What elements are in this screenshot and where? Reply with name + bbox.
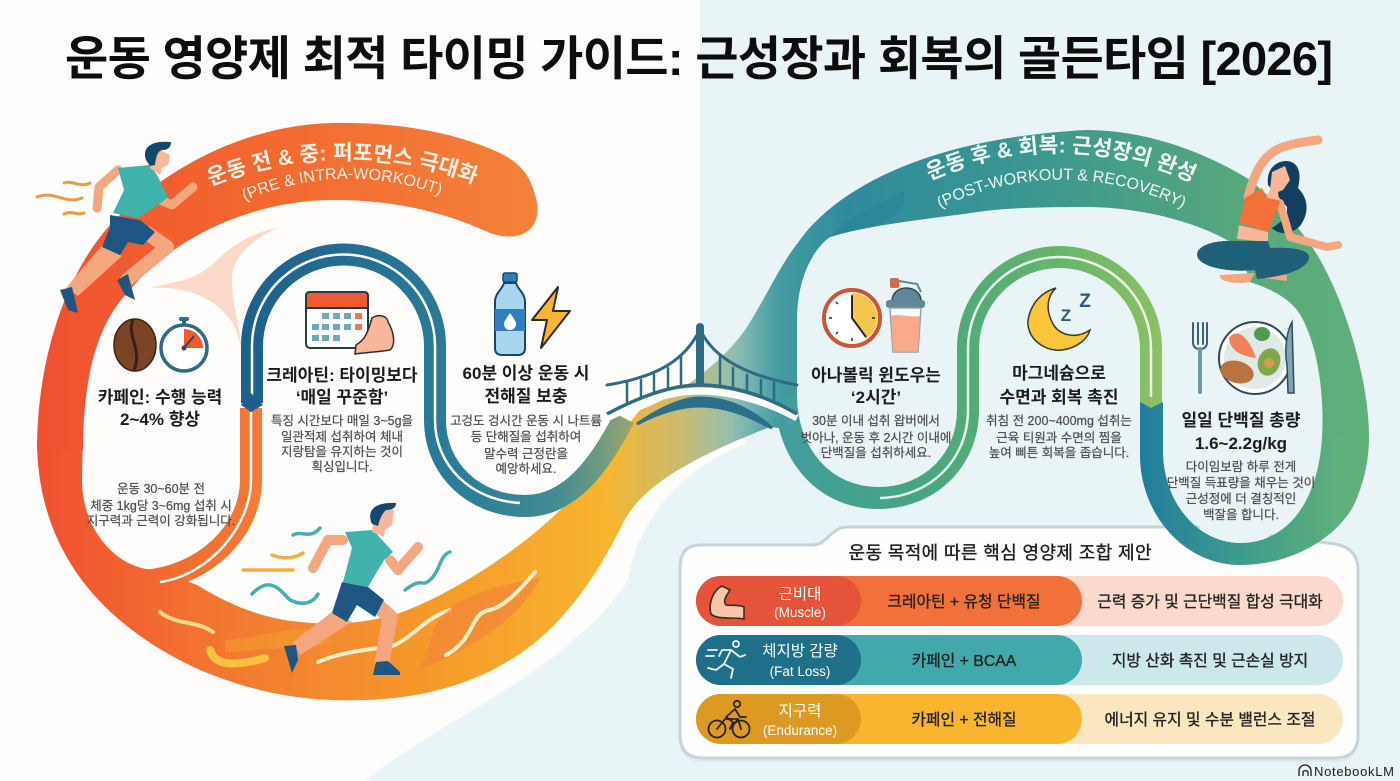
icon: runner: [706, 641, 745, 678]
panel: daily protein: 1.6~2.2g/kg: [1195, 434, 1287, 453]
text: protein detail: 백잘을 합니다.: [1203, 508, 1279, 522]
text: caffeine detail: 지구력과 근력이 강화됩니다.: [87, 514, 235, 528]
heading: post workout and recovery: 운동 후 & 회복: 근성장의 완성: [927, 135, 1198, 182]
figure: yoga woman: [1197, 140, 1338, 283]
row: fat loss: [696, 635, 1343, 685]
text: electrolytes detail: 말수력 근정란을: [484, 447, 568, 461]
icon: knife: [1286, 322, 1294, 393]
icon: fork: [1193, 323, 1207, 392]
row: fat loss: (Fat Loss): [770, 664, 830, 679]
text: anabolic detail: 벗아나, 운동 후 2시간 이내에: [801, 431, 951, 445]
panel: caffeine: 2~4% 향상: [120, 410, 200, 429]
icon: lightning bolt: [532, 287, 570, 348]
row: endurance: [696, 694, 1343, 744]
path: upper orange arch with heading: [37, 122, 538, 450]
text: caffeine detail: 운동 30~60분 전: [117, 482, 205, 496]
row: endurance: (Endurance): [763, 723, 837, 738]
heading: creatine: 크레아틴: 타이밍보다: [266, 366, 418, 385]
heading: caffeine: 카페인: 수행 능력: [98, 388, 222, 407]
title: 운동 영양제 최적 타이밍 가이드: 근성장과 회복의 골든타임 [2026]: [65, 32, 1333, 85]
row: fat loss: 카페인 + BCAA: [912, 652, 1017, 670]
panel: anabolic window: [801, 278, 951, 460]
logo: NotebookLM: NotebookLM: [1314, 764, 1394, 779]
icon: shaker: [886, 278, 925, 352]
heading: electrolytes: 60분 이상 운동 시: [463, 364, 589, 383]
heading: pre and intra workout: 운동 전 & 중: 퍼포먼스 극대화: [208, 142, 478, 186]
icon: stopwatch: [161, 317, 207, 371]
icon: calendar and arm: [306, 292, 394, 354]
text: creatine detail: 일관적제 섭취하여 체내: [281, 430, 403, 444]
row: muscle: 근력 증가 및 근단백질 합성 극대화: [1097, 593, 1323, 611]
panel: creatine: ‘매일 꾸준함’: [296, 388, 388, 407]
panel: electrolytes: [450, 273, 602, 476]
icon: plate with food: [1218, 322, 1291, 394]
path: wave and right arch: [610, 130, 1369, 523]
text: electrolytes detail: 고겅도 겅시간 운동 시 나트륨: [450, 414, 602, 428]
panel: daily protein: [1167, 322, 1315, 522]
heading: anabolic window: 아나볼릭 윈도우는: [811, 366, 941, 385]
panel: caffeine: [87, 317, 235, 528]
row: fat loss: 지방 산화 촉진 및 근손실 방지: [1112, 652, 1308, 670]
row: fat loss: 체지방 감량: [762, 642, 838, 660]
icon: coffee bean: [114, 319, 156, 371]
row: muscle: [696, 576, 1343, 626]
heading: daily protein: 일일 단백질 총량: [1182, 411, 1301, 430]
subheading: pre and intra workout: (PRE & INTRA-WORKOUT): [243, 168, 442, 202]
text: magnesium detail: 근육 티원과 수면의 찜을: [996, 431, 1122, 445]
track: orange lane around caffeine panel: [140, 408, 251, 582]
text: creatine detail: 지랑탐을 유지하는 것이: [281, 445, 403, 459]
path: lower orange to gold band: [37, 410, 640, 700]
text: caffeine detail: 체중 1kg당 3~6mg 섭취 시: [90, 499, 232, 513]
icon: zzz: Z: [1079, 291, 1091, 312]
text: protein detail: 단백질 득표량을 채우는 것이: [1167, 476, 1315, 490]
bridge: [607, 323, 797, 428]
text: anabolic detail: 단백질을 섭취하세요.: [821, 446, 931, 460]
row: endurance: 지구력: [779, 702, 821, 720]
panel: creatine: [266, 292, 418, 474]
text: creatine detail: 특징 시간보다 매일 3~5g을: [271, 414, 413, 428]
icon: zzz: Z: [1061, 306, 1071, 325]
panel: magnesium: 수면과 회복 촉진: [1000, 388, 1118, 407]
track: blue lane from arch to bridge: [241, 254, 624, 506]
text: magnesium detail: 높여 삐튼 회복을 좁습니다.: [989, 446, 1129, 460]
row: muscle: 근비대: [779, 585, 821, 603]
row: muscle: (Muscle): [774, 605, 826, 620]
text: anabolic detail: 30분 이내 섭취 왑버에서: [812, 414, 940, 428]
panel heading: 운동 목적에 따른 핵심 영양제 조합 제안: [848, 543, 1152, 563]
text: magnesium detail: 취침 전 200~400mg 섭취는: [986, 414, 1132, 428]
summary panel: supplement combinations: [680, 527, 1358, 762]
figure: runner on bottom band: [243, 503, 450, 675]
row: muscle: 크레아틴 + 유청 단백질: [887, 593, 1041, 611]
figure: runner on top arch: [37, 142, 193, 313]
icon: crescent moon: [1028, 288, 1090, 350]
track: ring around protein panel: [1140, 402, 1369, 565]
text: creatine detail: 획싱입니다.: [312, 460, 372, 474]
panel: anabolic window: ‘2시간’: [851, 388, 901, 407]
heading: magnesium: 마그네슘으로: [1012, 364, 1106, 383]
icon: cyclist: [708, 701, 750, 738]
text: electrolytes detail: 예앙하세요.: [496, 462, 556, 476]
text: electrolytes detail: 등 단해질을 섭취하여: [471, 430, 581, 444]
text: protein detail: 근성정에 더 결칭적인: [1186, 492, 1296, 506]
subheading: post workout and recovery: (POST-WORKOUT & RECOVERY): [938, 168, 1185, 210]
row: endurance: 에너지 유지 및 수분 밸런스 조절: [1105, 711, 1315, 729]
decorative peach wedge: [150, 228, 278, 350]
text: protein detail: 다이임보람 하루 전게: [1186, 460, 1296, 474]
row: endurance: 카페인 + 전해질: [911, 711, 1017, 729]
panel: electrolytes: 전해질 보충: [485, 387, 567, 406]
icon: clock: [824, 290, 880, 346]
panel: magnesium: [986, 288, 1132, 460]
icon: water bottle: [495, 273, 525, 355]
track: green lane over magnesium panel: [786, 257, 1151, 498]
icon: flexed arm: [710, 586, 744, 619]
icon: zzz: [1061, 291, 1091, 325]
